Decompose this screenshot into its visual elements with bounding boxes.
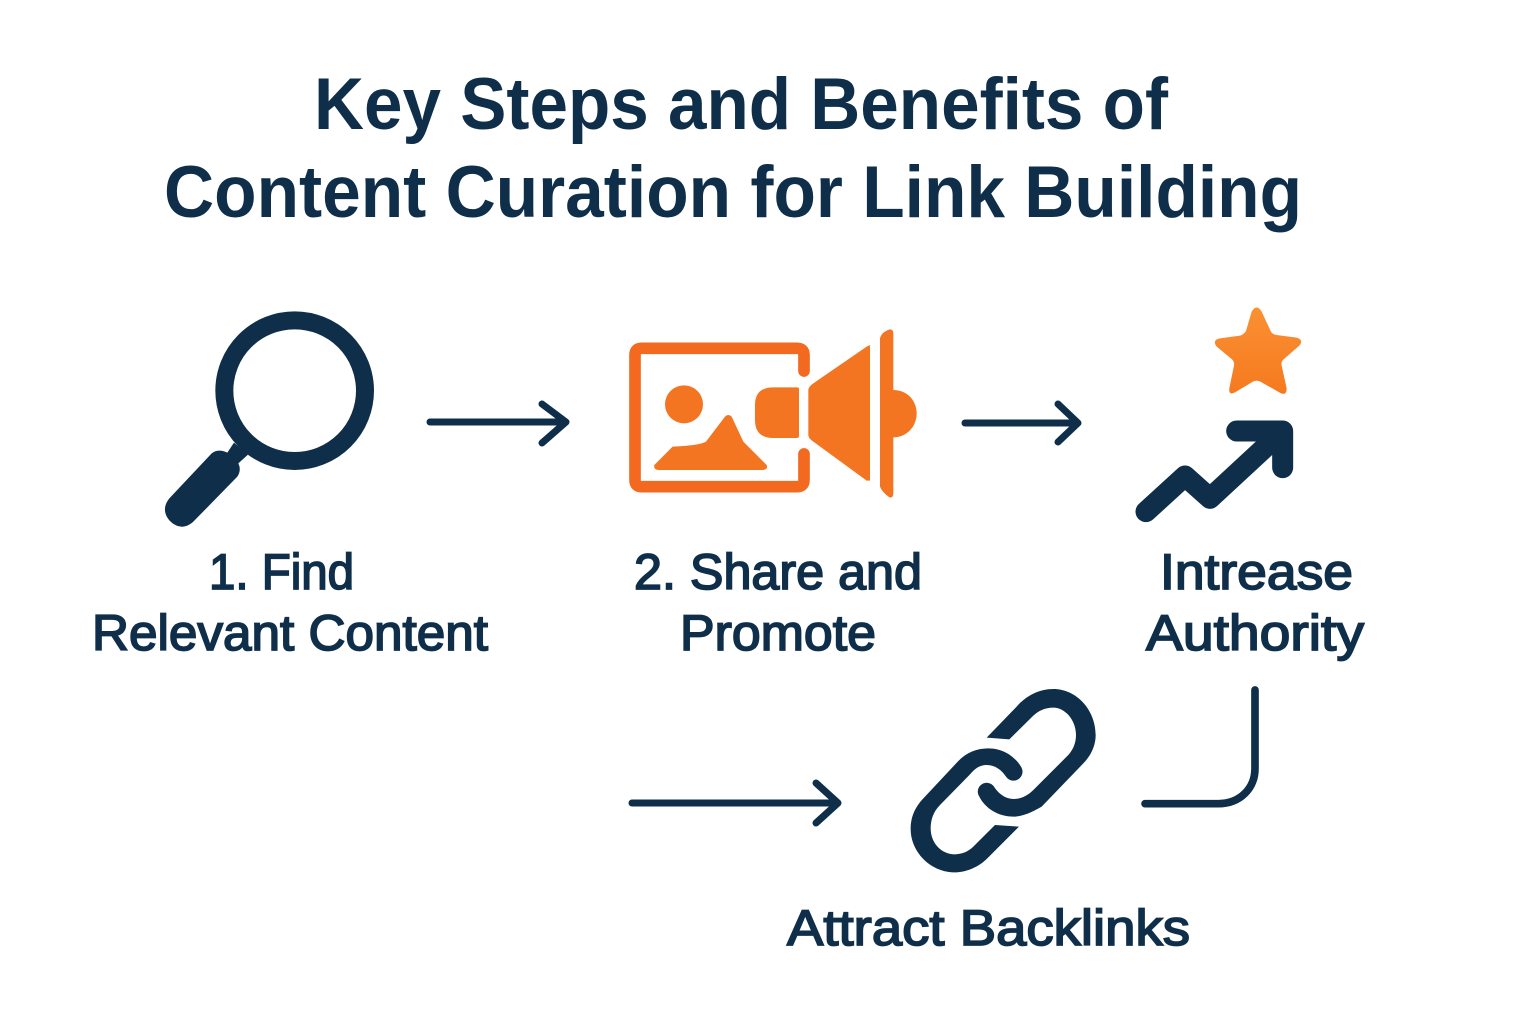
- step 2 label: [634, 544, 922, 661]
- arrow: curved connector from authority to backlinks: [1145, 690, 1255, 804]
- icon: chain link: [911, 689, 1096, 872]
- icon: magnifying glass: [165, 320, 365, 527]
- step 1 label: Relevant Content: [92, 605, 488, 661]
- title: Key Steps and Benefits of: [314, 64, 1169, 145]
- step 3 label: Intrease: [1160, 544, 1353, 600]
- title: [164, 64, 1302, 233]
- step 2 label: Promote: [680, 605, 876, 661]
- icon: rising trend arrow: [1146, 431, 1283, 512]
- arrow: into backlinks: [632, 783, 838, 823]
- step 2 label: 2. Share and: [634, 544, 922, 600]
- step 3 label: [1146, 544, 1364, 661]
- arrow: step 1 to step 2: [430, 404, 566, 443]
- icon: image and megaphone: [635, 329, 917, 497]
- step 1 label: 1. Find: [209, 544, 354, 600]
- title: Content Curation for Link Building: [164, 152, 1302, 233]
- backlinks label: Attract Backlinks: [787, 900, 1190, 956]
- icon: star: [1215, 307, 1301, 394]
- arrow: step 2 to authority: [965, 404, 1078, 442]
- step 3 label: Authority: [1146, 605, 1364, 661]
- step 1 label: [92, 544, 488, 661]
